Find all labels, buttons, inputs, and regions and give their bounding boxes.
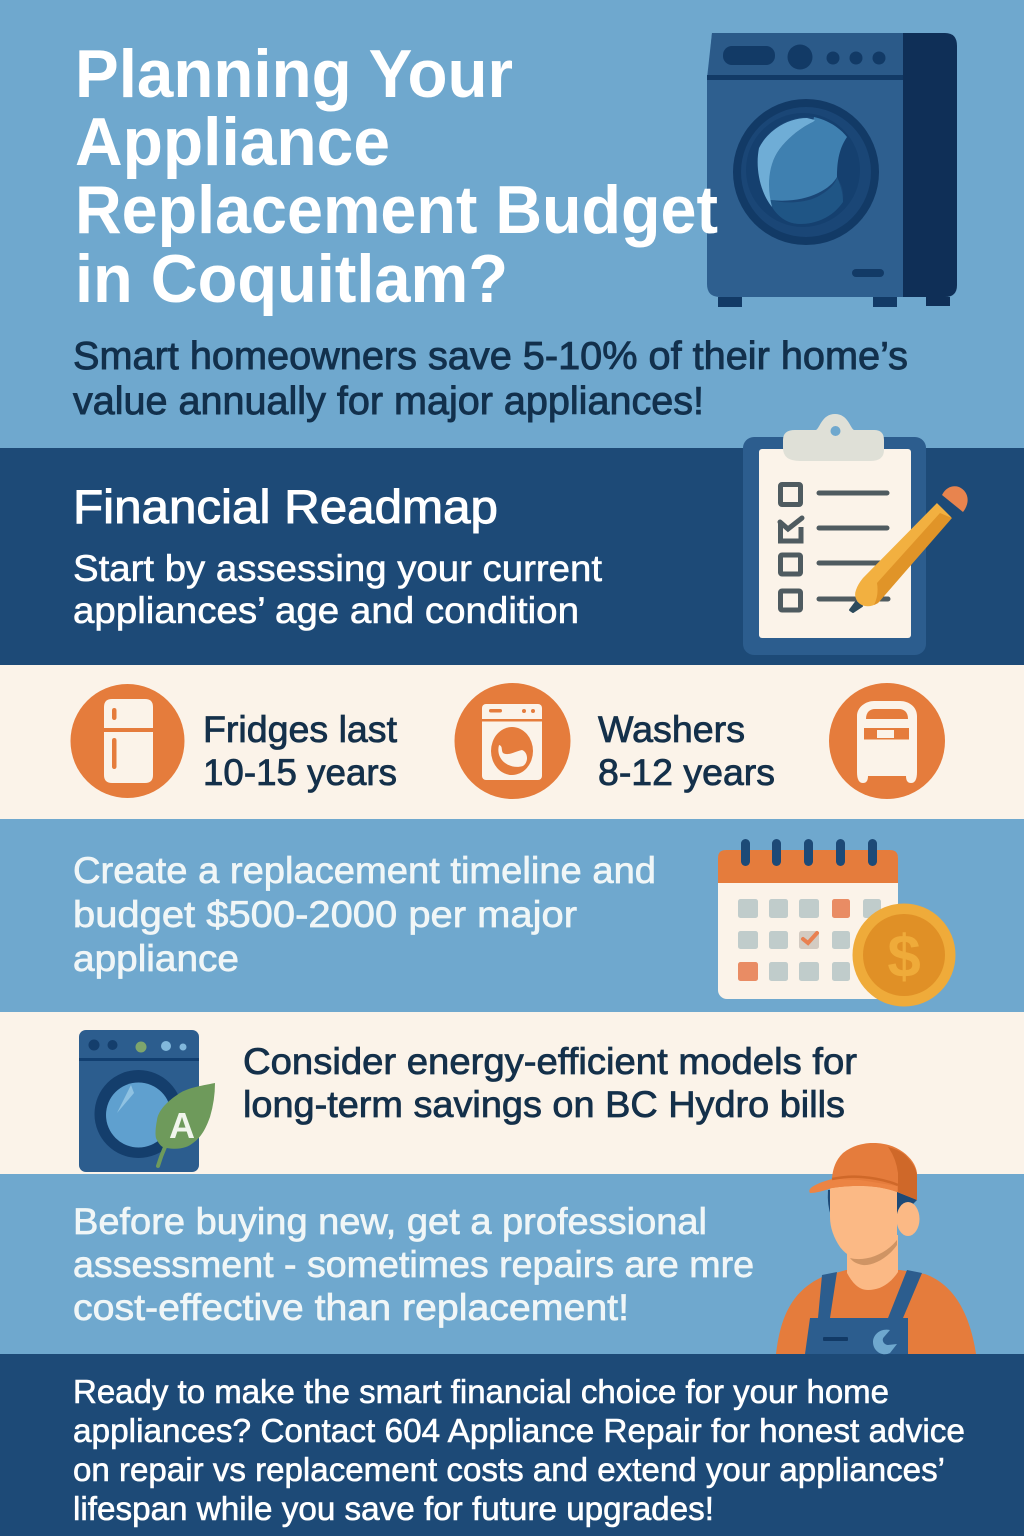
text: fridge lifespan: [203, 709, 398, 793]
title: Replacement Budget: [75, 172, 718, 248]
panel: timeline background: [0, 819, 1024, 1012]
call to action text: [73, 1373, 965, 1527]
call to action text: lifespan while you save for future upgrades!: [73, 1490, 714, 1527]
subtitle: value annually for major appliances!: [73, 380, 704, 423]
panel: assessment background: [0, 1174, 1024, 1354]
text block: replacement timeline: [73, 850, 656, 979]
text: fridge lifespan: 10-15 years: [203, 752, 397, 793]
subtitle: [73, 335, 908, 423]
call to action text: Ready to make the smart financial choice for your home: [73, 1373, 889, 1410]
text block: assess appliances: appliances’ age and condition: [73, 590, 579, 631]
text block: professional assessment: assessment - sometimes repairs are mre: [73, 1244, 754, 1285]
icon: washer: [454, 683, 570, 799]
icon: energy-efficient washer: A: [169, 1105, 195, 1146]
panel: lifespans background: [0, 665, 1024, 819]
text block: energy-efficient models: long-term savings on BC Hydro bills: [243, 1084, 845, 1125]
icon: calendar and coin: $: [887, 923, 921, 990]
text: fridge lifespan: Fridges last: [203, 709, 398, 750]
text: washer lifespan: 8-12 years: [598, 752, 775, 793]
subtitle: Smart homeowners save 5-10% of their home’s: [73, 335, 908, 378]
icon: clipboard and pencil: [743, 414, 968, 655]
panel: call to action background: [0, 1354, 1024, 1536]
call to action text: on repair vs replacement costs and extend your appliances’: [73, 1451, 945, 1488]
panel: energy efficiency background: [0, 1012, 1024, 1174]
panel: financial roadmap background: [0, 448, 1024, 665]
title: Appliance: [75, 104, 390, 180]
text block: professional assessment: cost-effective than replacement!: [73, 1287, 629, 1328]
text block: professional assessment: Before buying new, get a professional: [73, 1201, 707, 1242]
text: washer lifespan: [598, 709, 775, 793]
heading: financial readmap: Financial Readmap: [73, 480, 498, 533]
icon: energy-efficient washer: [79, 1030, 215, 1172]
text block: replacement timeline: Create a replacement timeline and: [73, 850, 656, 891]
text: washer lifespan: Washers: [598, 709, 745, 750]
text block: replacement timeline: appliance: [73, 938, 239, 979]
text block: replacement timeline: budget $500-2000 per major: [73, 894, 577, 935]
icon: calendar and coin: [718, 839, 956, 1006]
title: Planning Your: [75, 36, 513, 112]
icon: fridge: [70, 684, 184, 798]
text block: energy-efficient models: Consider energy-efficient models for: [243, 1041, 857, 1082]
text block: assess appliances: Start by assessing your current: [73, 548, 603, 589]
call to action text: appliances? Contact 604 Appliance Repair for honest advice: [73, 1412, 965, 1449]
text block: professional assessment: [73, 1201, 754, 1328]
icon: washing machine: [707, 33, 957, 307]
title: in Coquitlam?: [75, 241, 508, 317]
title: [75, 36, 718, 317]
text block: energy-efficient models: [243, 1041, 857, 1125]
icon: repair technician: [776, 1143, 976, 1354]
icon: dishwasher: [829, 683, 945, 799]
panel: header background: [0, 0, 1024, 448]
text block: assess appliances: [73, 548, 603, 631]
